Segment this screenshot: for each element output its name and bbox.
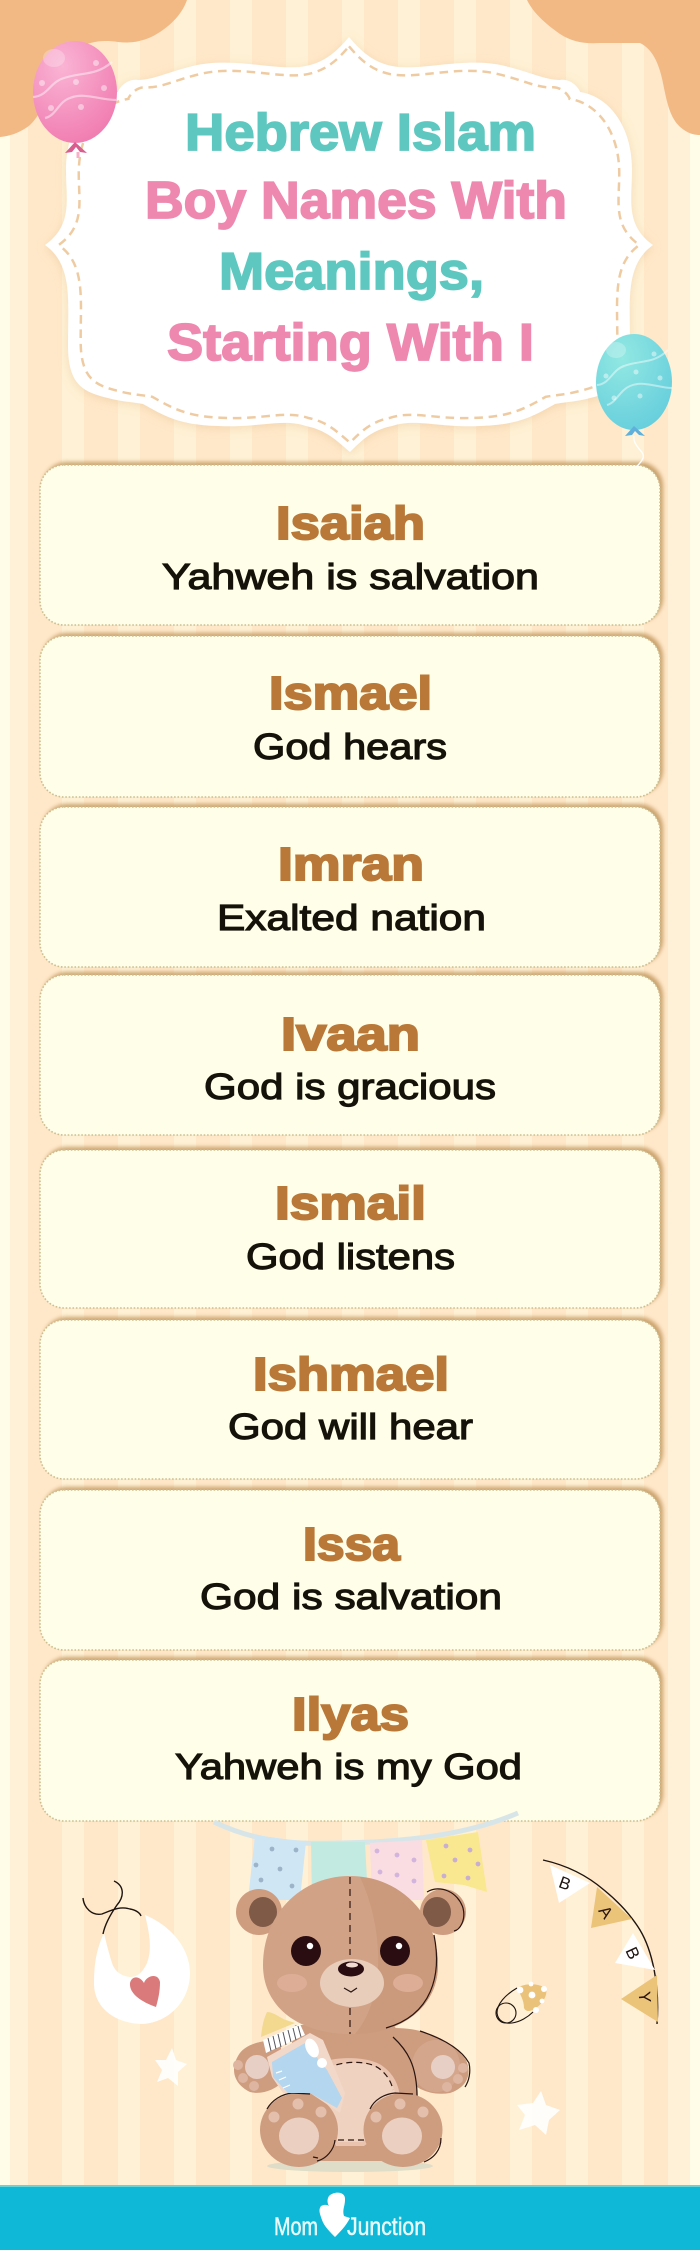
card 3 <box>40 804 663 967</box>
card 2 <box>40 633 663 797</box>
ground shadow <box>267 2160 433 2172</box>
logo: MomJunction <box>274 2193 426 2241</box>
title <box>145 104 567 372</box>
bib strings <box>83 1881 141 1934</box>
logo wordmark: Mom <box>274 2213 318 2241</box>
card 5 <box>40 1147 663 1308</box>
flag A <box>591 1887 632 1928</box>
card 4: Ivaan <box>281 1008 420 1060</box>
card 1: Isaiah <box>276 497 425 549</box>
bear left arm <box>233 2040 285 2093</box>
card 5: God listens <box>246 1236 455 1277</box>
card 2: God hears <box>253 726 447 767</box>
bear nose <box>338 1962 364 1992</box>
icon: blue balloon <box>596 334 672 467</box>
card 7 <box>40 1487 663 1650</box>
card 8: Ilyas <box>292 1688 409 1740</box>
flag: yellow dotted <box>426 1832 487 1892</box>
flag B second <box>615 1933 655 1970</box>
flag Y: Y <box>635 1991 654 2004</box>
card 6: God will hear <box>228 1406 473 1447</box>
card 8 <box>40 1657 663 1821</box>
bottle glass <box>267 2033 345 2113</box>
bear eyes <box>291 1936 410 1966</box>
card 1 <box>40 462 663 625</box>
icon: safety pin <box>496 1982 547 2023</box>
card 1: Yahweh is salvation <box>162 556 539 597</box>
baby bottle <box>261 2012 345 2113</box>
curtain: top right <box>527 0 700 135</box>
card 6: Ishmael <box>253 1348 449 1400</box>
title: Meanings, <box>219 243 484 301</box>
flag: blue dotted <box>248 1835 306 1900</box>
flag A: A <box>595 1902 617 1923</box>
title: Starting With I <box>167 314 534 372</box>
card 3: Exalted nation <box>217 897 486 938</box>
bib heart <box>130 1976 160 2007</box>
bear muzzle <box>320 1959 384 2007</box>
card 5: Ismail <box>275 1177 426 1229</box>
icon: star right <box>517 2091 560 2135</box>
footer bar <box>0 2185 700 2250</box>
card 7: Issa <box>303 1518 400 1570</box>
baby banner <box>543 1860 658 2024</box>
flag Y <box>621 1975 658 2022</box>
icon: bib <box>83 1881 190 2024</box>
bottle highlights <box>276 2036 327 2088</box>
bear belly patch <box>316 2058 400 2146</box>
bear cheeks <box>277 1974 423 1992</box>
bear body <box>289 2025 418 2161</box>
title plaque <box>45 37 653 452</box>
card 7: God is salvation <box>200 1576 502 1617</box>
logo wordmark: Junction <box>347 2213 426 2241</box>
flag B: B <box>556 1873 573 1894</box>
card 8: Yahweh is my God <box>175 1746 522 1787</box>
bear head <box>263 1876 438 2034</box>
teddy bear <box>233 1876 470 2172</box>
bear right arm <box>395 2028 470 2094</box>
card 4: God is gracious <box>204 1066 496 1107</box>
logo icon <box>319 2193 350 2237</box>
card 6 <box>40 1317 663 1479</box>
logo wordmark <box>274 2213 426 2241</box>
card 2: Ismael <box>269 667 432 719</box>
flag: pink dotted <box>370 1840 424 1900</box>
title: Hebrew Islam <box>185 104 536 162</box>
bunting: pastel flags <box>214 1813 518 1900</box>
flag: mint <box>311 1842 368 1900</box>
curtain: top left <box>0 0 187 137</box>
bottle liquid <box>272 2043 342 2108</box>
flag B second: B <box>622 1944 644 1962</box>
bear right foot <box>364 2093 442 2167</box>
flag B <box>550 1865 590 1903</box>
bear right ear <box>420 1889 466 1935</box>
card 3: Imran <box>278 838 424 890</box>
bear left foot <box>260 2093 338 2167</box>
icon: star left <box>155 2048 187 2086</box>
bottle cap <box>263 2024 305 2053</box>
title: Boy Names With <box>145 172 567 230</box>
bear left ear <box>236 1889 282 1935</box>
bottle nipple <box>261 2012 295 2037</box>
icon: pink balloon <box>33 41 117 158</box>
card 4 <box>40 972 663 1135</box>
